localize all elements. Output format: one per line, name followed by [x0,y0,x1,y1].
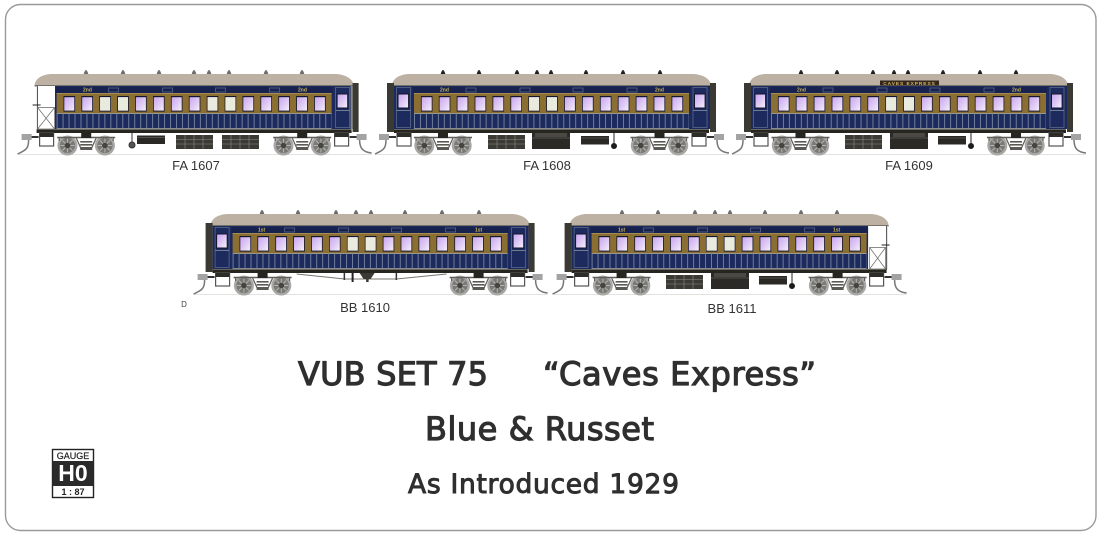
class mark: 1st [833,228,841,234]
badge: gauge H0 1:87: H0 [58,460,88,486]
carriage: FA 1609 [732,70,1086,173]
class mark: 2nd [1012,88,1021,94]
class mark [618,228,841,234]
coach drawing FA 1609 [732,70,1086,156]
header board: Caves Express: CAVES EXPRESS [883,81,936,87]
class mark: 1st [618,228,626,234]
note D: D [181,300,187,309]
subtitle: Blue & Russet [425,410,654,448]
class mark [440,88,664,94]
label FA 1608: FA 1608 [523,158,571,173]
carriage: FA 1608 [375,70,729,173]
coach drawing BB 1611 [553,210,907,296]
carriage: FA 1607 [18,70,372,173]
coach drawing BB 1610 [194,210,548,296]
label FA 1609: FA 1609 [885,158,933,173]
coach drawing FA 1607 [18,70,372,156]
header board: Caves Express [880,80,939,87]
class mark: 1st [258,228,266,234]
class mark: 2nd [797,88,806,94]
class mark: 2nd [83,88,92,94]
title line: “Caves Express” [543,355,816,393]
badge: gauge H0 1:87: 1 : 87 [61,487,85,497]
coach drawing FA 1608 [375,70,729,156]
badge: gauge H0 1:87 [52,450,94,498]
class mark: 2nd [440,88,449,94]
class mark: 2nd [655,88,664,94]
title line [298,355,816,393]
class mark [258,228,483,234]
class mark [83,88,307,94]
carriage: BB 1610 [181,210,548,315]
label BB 1611: BB 1611 [708,301,756,316]
class mark: 1st [475,228,483,234]
class mark: 2nd [298,88,307,94]
title line: VUB SET 75 [298,355,488,393]
class mark [797,88,1021,94]
carriage: BB 1611 [553,210,907,316]
badge: gauge H0 1:87: GAUGE [57,451,89,461]
label BB 1610: BB 1610 [340,300,390,315]
label FA 1607: FA 1607 [172,158,220,173]
date line: As Introduced 1929 [408,469,679,500]
